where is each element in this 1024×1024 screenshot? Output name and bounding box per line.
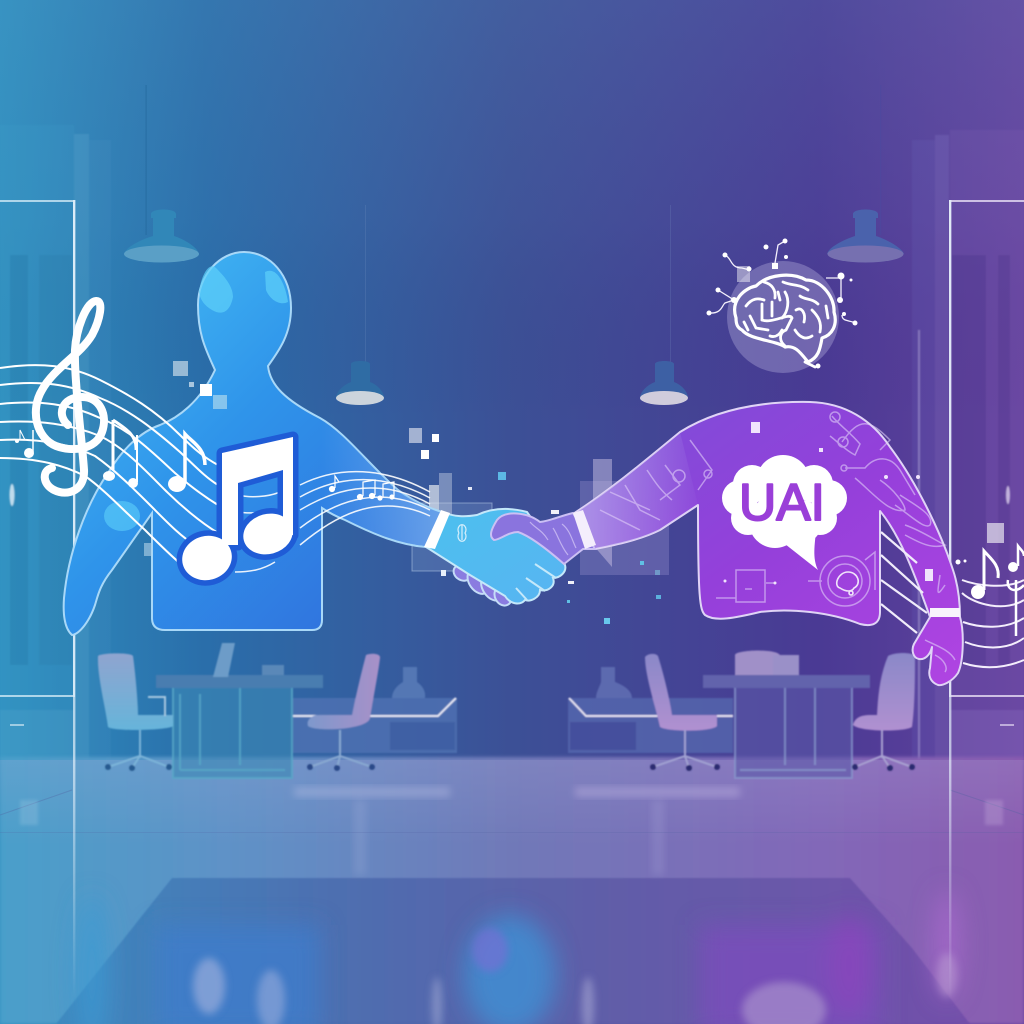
small music notes [15,420,394,500]
low cabinet [568,667,733,753]
sunken floor panel [56,878,970,1024]
blue wrist symbol [458,525,466,541]
door frames [0,200,1024,1000]
forearm overlay [574,432,698,548]
brain icon [706,238,858,373]
handshake [424,509,596,609]
right music notes [956,523,1024,667]
blue human figure [64,252,442,635]
treble clef [36,301,104,493]
blue hand [426,509,565,603]
chair [645,654,720,771]
chair [98,653,173,771]
brain folds [744,282,828,367]
staff right of note [235,472,430,572]
small brain icon on chest [837,572,858,595]
logo wordmark: UAI [739,474,825,532]
floor reflections [76,890,961,1024]
large music note icon [177,437,297,586]
purple fingers [451,562,515,609]
note [103,420,138,488]
forearm overlay [322,420,441,546]
hand circuit traces [530,522,576,555]
blue cuff [424,510,450,549]
purple hand [491,513,595,564]
note outline [177,437,297,586]
notes on the forearm [330,476,394,500]
floor sheen [0,760,1024,875]
low cabinet [293,667,457,753]
note [168,434,205,492]
neural nodes [706,238,858,368]
ceiling lamps [124,85,904,405]
office furniture left [98,643,457,778]
body [573,402,963,685]
floor [0,757,1024,1024]
head highlights [199,266,233,313]
lamp left large [124,85,199,262]
staff flowing across blue figure [0,365,430,572]
neural connectors [709,241,855,323]
chair [852,653,915,771]
lamp right large [827,85,904,262]
lamp centre right [640,205,688,405]
right hand cuff [930,608,960,617]
lamp centre left [336,205,384,405]
purple cuff [573,510,596,549]
floating data squares [144,361,661,624]
translucent data panels behind hands [412,459,669,575]
speech bubble logo [722,455,847,570]
finger creases [516,564,556,600]
chair behind desk [735,650,780,675]
chair [307,654,380,771]
office furniture right [568,650,915,778]
brain outline [735,275,835,362]
note fill [177,437,297,586]
desk [156,643,323,778]
circuit nodes [724,422,933,584]
circuit traces [600,412,955,672]
note [15,430,34,458]
right wall columns [912,130,1024,765]
body [64,252,442,635]
staff lines between body and right arm [881,532,927,633]
purple AI figure [573,402,963,685]
desk [703,655,870,778]
left wall columns [0,125,111,765]
